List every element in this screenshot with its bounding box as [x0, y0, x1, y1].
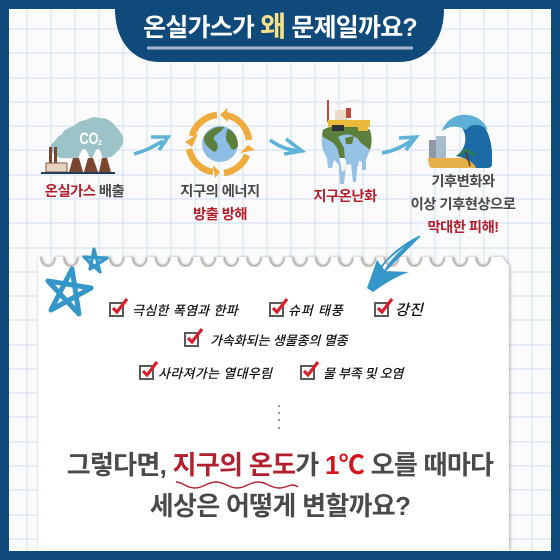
- icon: factory emitting CO2: 2: [98, 140, 102, 147]
- label: blocking energy release: [180, 184, 260, 223]
- icon: factory emitting CO2: [41, 117, 124, 174]
- big blue arrow: [367, 235, 420, 292]
- label: emission: 온실가스 배출: [45, 184, 124, 200]
- label: blocking energy release: 지구의 에너지: [180, 184, 260, 200]
- icon: factory emitting CO2: CO: [80, 129, 98, 148]
- checkbox item: earthquake: [374, 298, 424, 320]
- label: blocking energy release: 방출 방해: [193, 207, 247, 223]
- torn paper panel: [37, 255, 512, 551]
- checkbox item: super typhoon: 슈퍼 태풍: [288, 300, 343, 319]
- closing question: 세상은 어떻게 변할까요?: [150, 491, 410, 521]
- checklist: [109, 298, 424, 382]
- arrow 1: [134, 135, 172, 156]
- header banner: [115, 9, 444, 62]
- title: 온실가스가 왜 문제일까요?: [143, 11, 417, 42]
- label: climate damage: 이상 기후현상으로: [411, 197, 515, 213]
- checkbox item: severe heat and cold: 극심한 폭염과 한파: [132, 300, 238, 319]
- closing question: 그렇다면, 지구의 온도가 1℃ 오를 때마다: [67, 450, 493, 480]
- arrow 2: [269, 138, 306, 156]
- arrow 3: [382, 135, 420, 155]
- closing question: [67, 450, 494, 521]
- checkbox item: earthquake: 강진: [395, 299, 423, 320]
- icon: melting earth: [322, 100, 372, 184]
- checkbox item: vanishing rainforest: 사라져가는 열대우림: [158, 363, 272, 382]
- icon: earth with circular arrows: [185, 108, 255, 178]
- label: climate damage: [411, 174, 516, 236]
- icon: tsunami wave: [428, 114, 492, 168]
- checkbox item: species extinction: 가속화되는 생물종의 멸종: [210, 330, 348, 349]
- label: climate damage: 기후변화와: [431, 174, 495, 190]
- label: global warming: 지구온난화: [313, 189, 377, 205]
- dotted divider: [278, 405, 280, 429]
- blue stars: [46, 247, 109, 316]
- checkbox item: super typhoon: [269, 298, 344, 319]
- checkbox item: water shortage: 물 부족 및 오염: [323, 363, 403, 382]
- label: climate damage: 막대한 피해!: [427, 220, 498, 236]
- wavy red underline: [176, 481, 298, 489]
- checkbox item: water shortage: [300, 361, 404, 382]
